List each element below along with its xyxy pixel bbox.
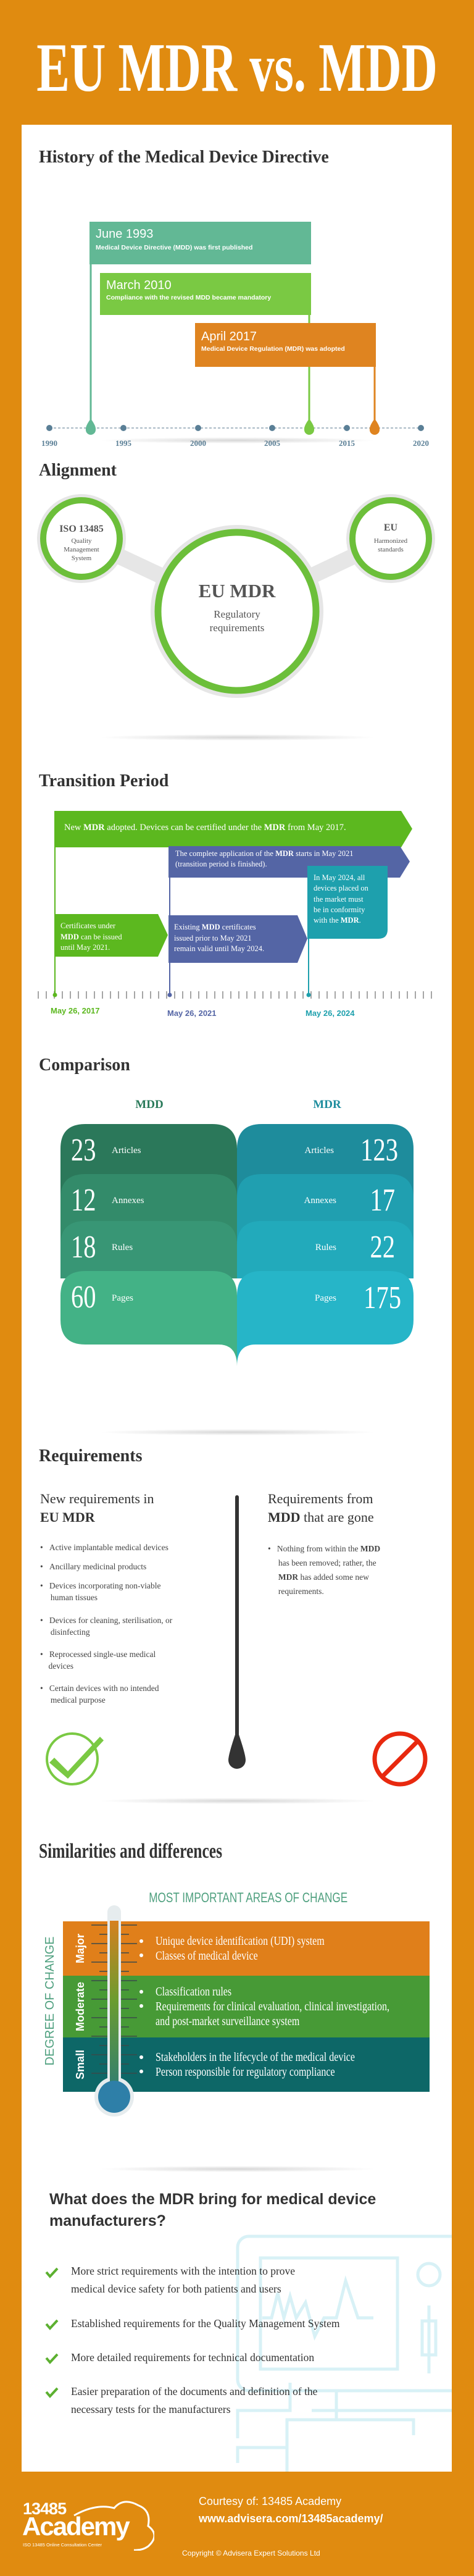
chart: comparison MDD vs MDR: 60 — [71, 1280, 96, 1315]
chart: degree of change thermometer: Classes of medical device — [156, 1949, 258, 1963]
chart: degree of change thermometer: Requirements for clinical evaluation, clinical investigation, — [156, 2000, 389, 2013]
column: requirements gone: MDD that are gone — [268, 1509, 374, 1525]
chart: degree of change thermometer: Unique device identification (UDI) system — [156, 1934, 325, 1948]
icon: prohibited — [373, 1732, 427, 1786]
heading: alignment: Alignment — [39, 461, 117, 480]
divider: vertical drop line — [228, 1495, 246, 1769]
diagram: alignment circles: Harmonized — [374, 537, 408, 545]
MDD numbers: 18 — [71, 1230, 96, 1265]
box: March 2010 — [100, 273, 311, 315]
chart: comparison MDD vs MDR: MDR — [313, 1098, 341, 1111]
chart: degree of change thermometer: Small — [74, 2050, 86, 2079]
chart: degree of change thermometer: Stakeholders in the lifecycle of the medical device — [156, 2050, 355, 2064]
chart: transition timeline: (transition period is finished). — [175, 860, 267, 868]
chart: comparison MDD vs MDR: 123 — [360, 1133, 398, 1168]
diagram: alignment circles: EU — [384, 522, 398, 533]
chart: transition timeline: MDD can be issued — [60, 933, 122, 941]
box: March 2010: March 2010 — [106, 279, 172, 292]
box: June 1993: June 1993 — [96, 227, 153, 241]
heading: history: History of the Medical Device Directive — [39, 148, 329, 167]
chart: comparison MDD vs MDR: Pages — [315, 1293, 336, 1303]
chart: transition timeline: The complete application of the MDR starts in May 2021 — [175, 849, 353, 858]
column: new requirements: • Ancillary medicinal products — [40, 1562, 146, 1571]
chart: comparison MDD vs MDR: Rules — [112, 1243, 133, 1252]
MDD labels: Articles — [112, 1146, 141, 1156]
column: new requirements: medical purpose — [51, 1695, 106, 1705]
column: requirements gone: • Nothing from within the MDD — [268, 1544, 380, 1553]
chart: transition timeline: until May 2021. — [60, 943, 110, 952]
column: new requirements: • Certain devices with no intended — [40, 1684, 159, 1693]
list: MDR benefits: More strict requirements with the intention to prove — [71, 2265, 295, 2277]
chart: transition timeline: Certificates under — [60, 921, 115, 930]
heading: similarities: Similarities and differences — [39, 1840, 222, 1863]
title: EU MDR vs. MDD — [36, 30, 438, 106]
chart: degree of change thermometer: Classification rules — [156, 1985, 231, 1999]
chart: transition timeline — [38, 811, 432, 1018]
chart: history timeline: 2000 — [190, 438, 206, 448]
heading: transition period: Transition Period — [39, 771, 168, 791]
diagram: alignment circles: EU MDR — [199, 580, 276, 602]
chart: comparison MDD vs MDR: Rules — [315, 1243, 336, 1252]
list: MDR benefits: medical device safety for both patients and users — [71, 2283, 281, 2295]
chart: degree of change thermometer — [43, 1890, 430, 2117]
box: June 1993: Medical Device Directive (MDD) was first published — [96, 244, 252, 251]
diagram: alignment circles: standards — [378, 546, 404, 553]
chart: history timeline: 1990 — [41, 438, 57, 448]
chart: comparison MDD vs MDR: 17 — [370, 1183, 395, 1218]
chart: history timeline — [41, 222, 429, 448]
footer text: www.advisera.com/13485academy/ — [199, 2512, 383, 2525]
box: June 1993 — [89, 222, 311, 264]
chart: transition timeline: May 26, 2024 — [306, 1009, 355, 1018]
heading: what does MDR bring: What does the MDR bring for medical device — [49, 2191, 376, 2208]
chart: history timeline: 2020 — [413, 438, 429, 448]
chart: comparison MDD vs MDR: 175 — [364, 1280, 401, 1315]
list: MDR benefits — [46, 2265, 339, 2415]
chart: transition timeline: In May 2024, all — [314, 873, 365, 882]
MDD numbers: 12 — [71, 1183, 96, 1218]
chart: transition timeline: devices placed on — [314, 884, 368, 892]
chart: comparison MDD vs MDR: MDD — [135, 1098, 164, 1111]
column: requirements gone — [268, 1491, 380, 1596]
chart: history timeline: 2015 — [339, 438, 356, 448]
chart: history timeline: 2005 — [264, 438, 280, 448]
chart: transition timeline: May 26, 2021 — [167, 1009, 217, 1018]
list: MDR benefits: Established requirements for the Quality Management System — [71, 2317, 339, 2330]
chart: degree of change thermometer: and post-market surveillance system — [156, 2015, 299, 2028]
logo: 13485 Academy — [22, 2499, 154, 2551]
column: new requirements: devices — [48, 1661, 73, 1671]
column: new requirements: • Reprocessed single-use medical — [40, 1650, 156, 1659]
logo: 13485 Academy: 13485 — [23, 2499, 66, 2518]
column: new requirements: human tissues — [51, 1593, 98, 1602]
column: requirements gone: requirements. — [278, 1587, 324, 1596]
chart: transition timeline: issued prior to May 2021 — [174, 934, 252, 942]
chart: comparison MDD vs MDR: Annexes — [304, 1196, 336, 1206]
diagram: alignment circles: System — [72, 555, 92, 562]
logo: 13485 Academy: Academy — [22, 2512, 129, 2541]
column: new requirements: • Devices for cleaning, sterilisation, or — [40, 1616, 172, 1625]
chart: comparison MDD vs MDR: 22 — [370, 1230, 395, 1265]
heading: requirements: Requirements — [39, 1446, 142, 1466]
footer text: Courtesy of: 13485 Academy — [199, 2495, 341, 2507]
heading: what does MDR bring — [49, 2191, 376, 2230]
column: new requirements: disinfecting — [51, 1627, 90, 1637]
chart: degree of change thermometer: DEGREE OF CHANGE — [43, 1937, 57, 2065]
icon: check circle — [46, 1732, 104, 1785]
chart: history timeline: 1995 — [115, 438, 132, 448]
chart: transition timeline: remain valid until May 2024. — [174, 944, 264, 953]
MDD numbers — [71, 1133, 96, 1315]
background illustration: monitor — [236, 2234, 452, 2472]
banner text: New MDR adopted. Devices can be certified under the MDR from May 2017. — [64, 823, 346, 833]
column: requirements gone: MDR has added some new — [278, 1572, 369, 1582]
logo: 13485 Academy: ISO 13485 Online Consultation Center — [23, 2542, 102, 2548]
chart: degree of change thermometer: Major — [74, 1934, 86, 1963]
column: new requirements: EU MDR — [40, 1509, 95, 1525]
box: April 2017: April 2017 — [201, 330, 257, 343]
chart: degree of change thermometer: MOST IMPORTANT AREAS OF CHANGE — [149, 1890, 347, 1905]
MDD numbers: 23 — [71, 1133, 96, 1168]
list: MDR benefits: Easier preparation of the documents and definition of the — [71, 2385, 317, 2398]
date labels: May 26, 2017 — [51, 1006, 100, 1015]
diagram: alignment circles: Management — [64, 546, 99, 553]
diagram: alignment circles: ISO 13485 — [59, 524, 104, 534]
diagram: alignment circles — [37, 494, 435, 698]
list: MDR benefits: More detailed requirements for technical documentation — [71, 2351, 314, 2364]
chart: comparison MDD vs MDR: Pages — [112, 1293, 133, 1303]
column: requirements gone: has been removed; rather, the — [278, 1558, 376, 1567]
diagram: alignment circles: requirements — [210, 622, 264, 634]
column: new requirements: New requirements in — [40, 1491, 154, 1506]
chart: transition timeline: Existing MDD certificates — [174, 923, 256, 931]
MDR labels and numbers: Articles — [305, 1146, 334, 1156]
diagram: alignment circles: Quality — [72, 537, 92, 545]
diagram: alignment circles: Regulatory — [214, 608, 260, 620]
column: new requirements: • Active implantable medical devices — [40, 1543, 168, 1552]
list: MDR benefits: necessary tests for the manufacturers — [71, 2403, 231, 2415]
footer text — [199, 2495, 383, 2525]
chart: comparison MDD vs MDR: Annexes — [112, 1196, 144, 1206]
copyright: Copyright © Advisera Expert Solutions Ltd — [182, 2549, 320, 2557]
box: April 2017: Medical Device Regulation (MDR) was adopted — [201, 345, 345, 353]
box: March 2010: Compliance with the revised MDD became mandatory — [106, 294, 271, 301]
chart: transition timeline: the market must — [314, 895, 364, 904]
column: requirements gone: Requirements from — [268, 1491, 373, 1506]
box: April 2017 — [195, 323, 376, 367]
chart: degree of change thermometer: Person responsible for regulatory compliance — [156, 2065, 335, 2079]
column: new requirements: • Devices incorporating non-viable — [40, 1581, 161, 1590]
chart: transition timeline: be in conformity — [314, 905, 365, 914]
column: new requirements — [40, 1491, 173, 1705]
heading: comparison: Comparison — [39, 1055, 130, 1075]
chart: comparison MDD vs MDR — [60, 1098, 414, 1366]
heading: what does MDR bring: manufacturers? — [49, 2212, 166, 2230]
chart: transition timeline: with the MDR. — [314, 916, 361, 925]
chart: degree of change thermometer: Moderate — [74, 1982, 86, 2031]
